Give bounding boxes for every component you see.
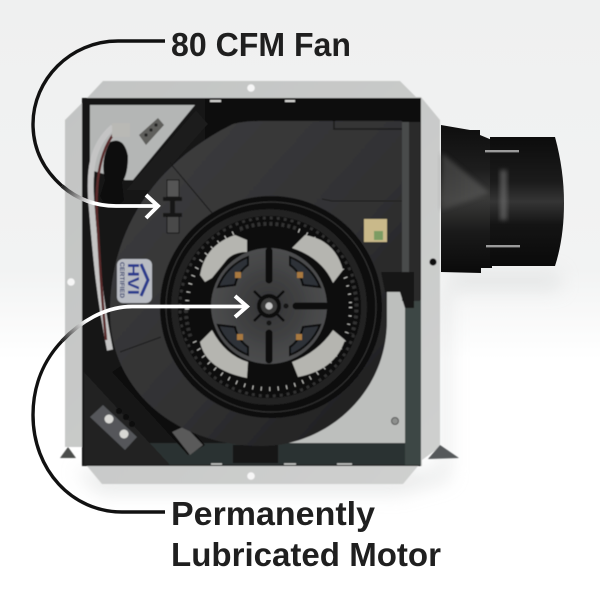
- plastic strap, upper left: [126, 110, 208, 190]
- badge plate: [117, 259, 152, 303]
- motor terminals: [235, 272, 303, 340]
- right inner wall: [405, 300, 421, 465]
- bracket holes: [144, 123, 158, 137]
- seam lines: [120, 163, 402, 352]
- button one: [104, 414, 114, 424]
- heading: Permanently Lubricated Motor: [171, 495, 441, 573]
- galvanized back plate, lower right: [230, 285, 405, 443]
- indicator holes: [116, 408, 135, 427]
- button two: [120, 430, 128, 438]
- grey pad top left: [200, 235, 247, 282]
- scalloped teeth, tick-free arcs: [186, 224, 356, 338]
- blade ticks: [187, 225, 351, 389]
- bracket in plate: [139, 118, 164, 145]
- sticker code: [374, 231, 383, 240]
- duct highlight: [500, 170, 507, 220]
- taper highlight: [442, 153, 490, 210]
- interior box: [82, 98, 421, 466]
- HVI badge: [117, 259, 152, 303]
- motor shaft: [265, 302, 273, 310]
- fading white leader: [62, 186, 158, 206]
- lower bracket: [172, 426, 203, 455]
- housing clip bracket: [163, 197, 182, 217]
- arrow: Permanently Lubricated Motor: [33, 296, 247, 512]
- blower scroll housing: [110, 121, 402, 446]
- disc ribs: [269, 251, 325, 360]
- grey pad bottom left: [200, 330, 248, 378]
- circuit board plate: [90, 405, 137, 450]
- arrow: 80 CFM Fan: [33, 41, 165, 218]
- sticker label: [364, 219, 387, 242]
- hub ring: [261, 298, 277, 314]
- tapered duct: [441, 125, 492, 273]
- ring highlight: [166, 202, 376, 412]
- motor disc: [211, 248, 327, 364]
- cylinder: [490, 137, 564, 266]
- white leader: [62, 306, 247, 341]
- housing clip upper: [167, 180, 179, 197]
- duct slot bottom: [486, 245, 520, 247]
- arrow head: [235, 296, 247, 317]
- blade shadow: [178, 216, 360, 398]
- disc dots: [266, 304, 288, 326]
- mounting holes: [67, 84, 255, 480]
- certification sticker: [364, 219, 387, 242]
- wire clump: [100, 141, 128, 207]
- housing clip lower: [167, 214, 179, 233]
- blower wheel: [160, 196, 382, 418]
- top tabs: [210, 100, 295, 102]
- plate rivet: [392, 418, 398, 424]
- bottom clip: [233, 445, 278, 463]
- hub: [257, 294, 281, 318]
- black leader: [33, 341, 165, 512]
- bottom wall highlights: [211, 463, 352, 465]
- wire connector: [112, 123, 130, 137]
- upper right inner wall: [402, 121, 420, 301]
- control board: [90, 405, 137, 450]
- housing top rib: [334, 121, 402, 129]
- bottom inner wall: [84, 443, 405, 465]
- grey pad bottom right: [292, 330, 345, 377]
- grey pad top right: [292, 235, 343, 283]
- arrow head: [146, 195, 158, 218]
- line two: Lubricated Motor: [171, 536, 441, 573]
- hub spokes: [254, 291, 284, 321]
- duct slot top: [485, 150, 519, 152]
- HVI mark: HVI: [124, 263, 141, 295]
- black leader: [33, 41, 165, 186]
- bottom corner tab right: [428, 445, 459, 459]
- blade bumps: [180, 218, 358, 396]
- metal flange: [65, 81, 440, 484]
- inner ring: [171, 209, 367, 405]
- control board housing: [84, 372, 170, 465]
- galvanized back plate, upper left: [90, 105, 195, 180]
- duct connector: [441, 125, 564, 273]
- wire bundle: [91, 127, 117, 350]
- line one: Permanently: [171, 495, 376, 532]
- upper right wall rail: [402, 121, 409, 301]
- screw hole on flange: [429, 258, 437, 266]
- drop shadow: [75, 272, 560, 494]
- outer ring: [160, 196, 382, 418]
- certified text: CERTIFIED: [118, 262, 125, 298]
- panel: metal fan housing: [60, 81, 459, 484]
- house roof mark: [141, 264, 148, 296]
- top inner shadow band: [205, 98, 421, 140]
- bottom corner tab left: [60, 447, 76, 458]
- bracket plate: [139, 118, 164, 145]
- motor windows: [218, 257, 320, 355]
- small bracket, right: [381, 272, 414, 308]
- heading: 80 CFM Fan: 80 CFM Fan: [171, 26, 351, 63]
- plastic channel, lower left: [112, 358, 205, 455]
